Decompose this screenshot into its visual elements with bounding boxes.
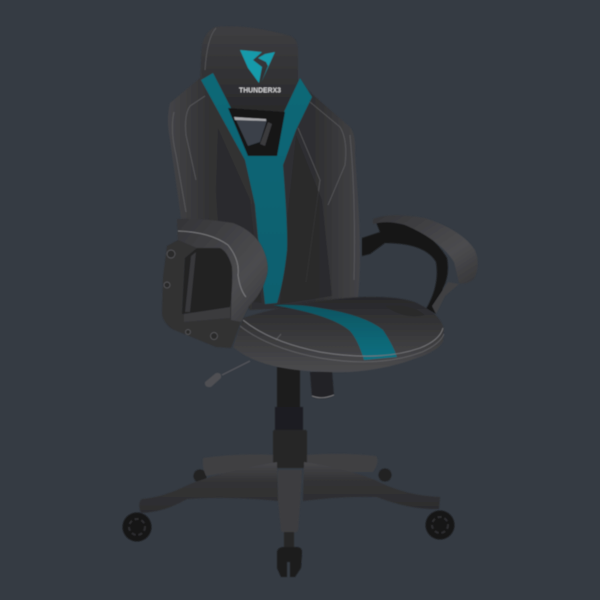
armrest opening interior	[182, 248, 232, 314]
rear star arms	[203, 454, 377, 476]
armrest lower strut	[432, 282, 459, 314]
headrest opening	[228, 108, 285, 156]
seat cushion	[233, 297, 444, 372]
icon: rear casters	[194, 468, 392, 482]
back cushion	[168, 26, 360, 310]
left armrest	[162, 219, 268, 348]
height lever	[205, 361, 250, 387]
armrest inner strut	[185, 252, 196, 312]
armrest trim line	[178, 231, 246, 297]
headrest shading	[202, 26, 298, 112]
seat piping	[240, 320, 444, 362]
seat front dip highlight	[385, 305, 425, 316]
logo: ThunderX3	[239, 50, 281, 94]
armrest black support	[362, 222, 448, 314]
icon: front caster	[277, 532, 302, 577]
seat tilt knob	[310, 370, 334, 399]
right armrest	[362, 215, 478, 314]
chair base	[122, 361, 454, 577]
armrest frame with opening	[162, 219, 268, 348]
icon: right caster	[426, 510, 454, 540]
icon: left caster	[122, 512, 152, 542]
armrest inner base	[184, 307, 230, 322]
logo icon	[240, 50, 275, 83]
dark inner panel right	[280, 135, 332, 304]
armrest padded top	[373, 215, 478, 284]
teal Y stripe	[201, 73, 312, 304]
seat teal stripe	[273, 305, 397, 360]
front-right star arm	[303, 462, 440, 509]
seat body	[233, 297, 444, 372]
front star arm	[278, 470, 302, 534]
dark inner panel left	[216, 128, 262, 303]
armrest bolts	[164, 250, 218, 340]
front-left star arm	[139, 462, 278, 513]
armrest padded top	[177, 219, 268, 322]
stitching lines	[172, 28, 354, 282]
logo wordmark: THUNDERX3	[239, 88, 281, 94]
gas lift column	[273, 367, 307, 468]
seat back	[168, 26, 360, 310]
